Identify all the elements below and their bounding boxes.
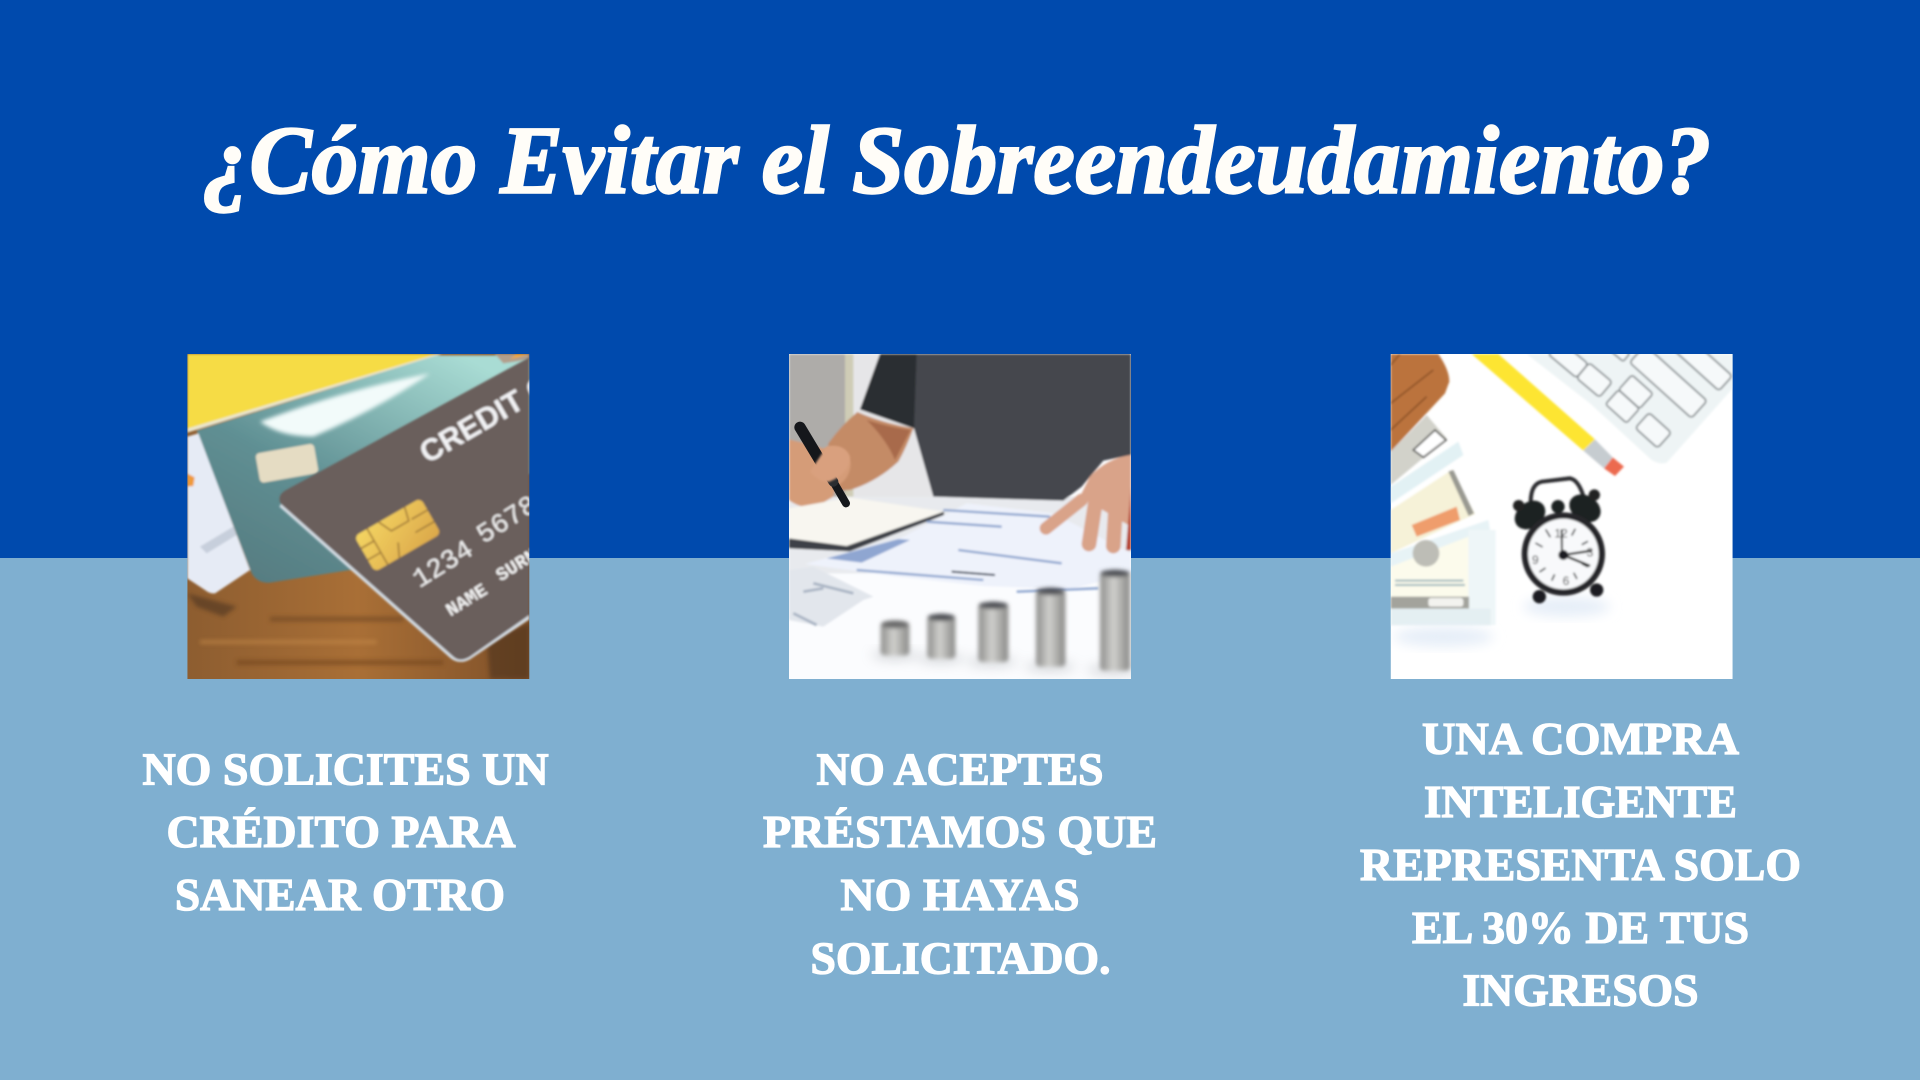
alarm clock: [1509, 478, 1606, 603]
caption: column 2: NO HAYAS: [840, 869, 1080, 920]
alarm clock: 6: [1563, 574, 1570, 588]
alarm clock: 9: [1532, 553, 1539, 567]
caption: column 2: PRÉSTAMOS QUE: [763, 806, 1157, 857]
wallet and banknotes: [1391, 354, 1496, 625]
caption: column 3: [1360, 713, 1801, 1016]
caption: column 3: REPRESENTA SOLO: [1360, 839, 1801, 890]
photo: credit cards: 1234: [408, 535, 480, 596]
caption: column 3: INGRESOS: [1462, 964, 1698, 1016]
caption: column 1: CRÉDITO PARA: [166, 806, 516, 857]
caption: column 2: SOLICITADO.: [810, 932, 1110, 984]
photo: credit cards: SURN: [492, 544, 542, 587]
caption: column 2: [763, 744, 1157, 984]
caption: column 3: UNA COMPRA: [1422, 713, 1739, 764]
photo: credit cards: CREDIT C: [414, 368, 556, 470]
caption: column 1: NO SOLICITES UN: [142, 744, 548, 794]
photo: alarm clock, money, pencil and keyboard: [1390, 354, 1733, 679]
pencil: [1472, 354, 1624, 476]
photo: credit cards: [187, 354, 556, 679]
alarm clock: 3: [1587, 546, 1594, 560]
photo: person reviewing documents with coin stacks: [789, 354, 1131, 679]
background: light blue bottom band: [0, 558, 1920, 1080]
caption: column 3: INTELIGENTE: [1424, 776, 1737, 827]
caption: column 1: SANEAR OTRO: [175, 869, 505, 920]
caption: column 1: [142, 744, 548, 920]
background: dark blue top band: [0, 0, 1920, 558]
title: ¿Cómo Evitar el Sobreendeudamiento?: [203, 106, 1711, 214]
caption: column 3: EL 30% DE TUS: [1412, 902, 1749, 953]
photo: credit cards: 5678: [472, 491, 544, 552]
caption: column 2: NO ACEPTES: [816, 744, 1104, 794]
keyboard: [1527, 336, 1733, 463]
photo: credit cards: NAME: [442, 579, 492, 622]
alarm clock: 12: [1554, 526, 1568, 540]
